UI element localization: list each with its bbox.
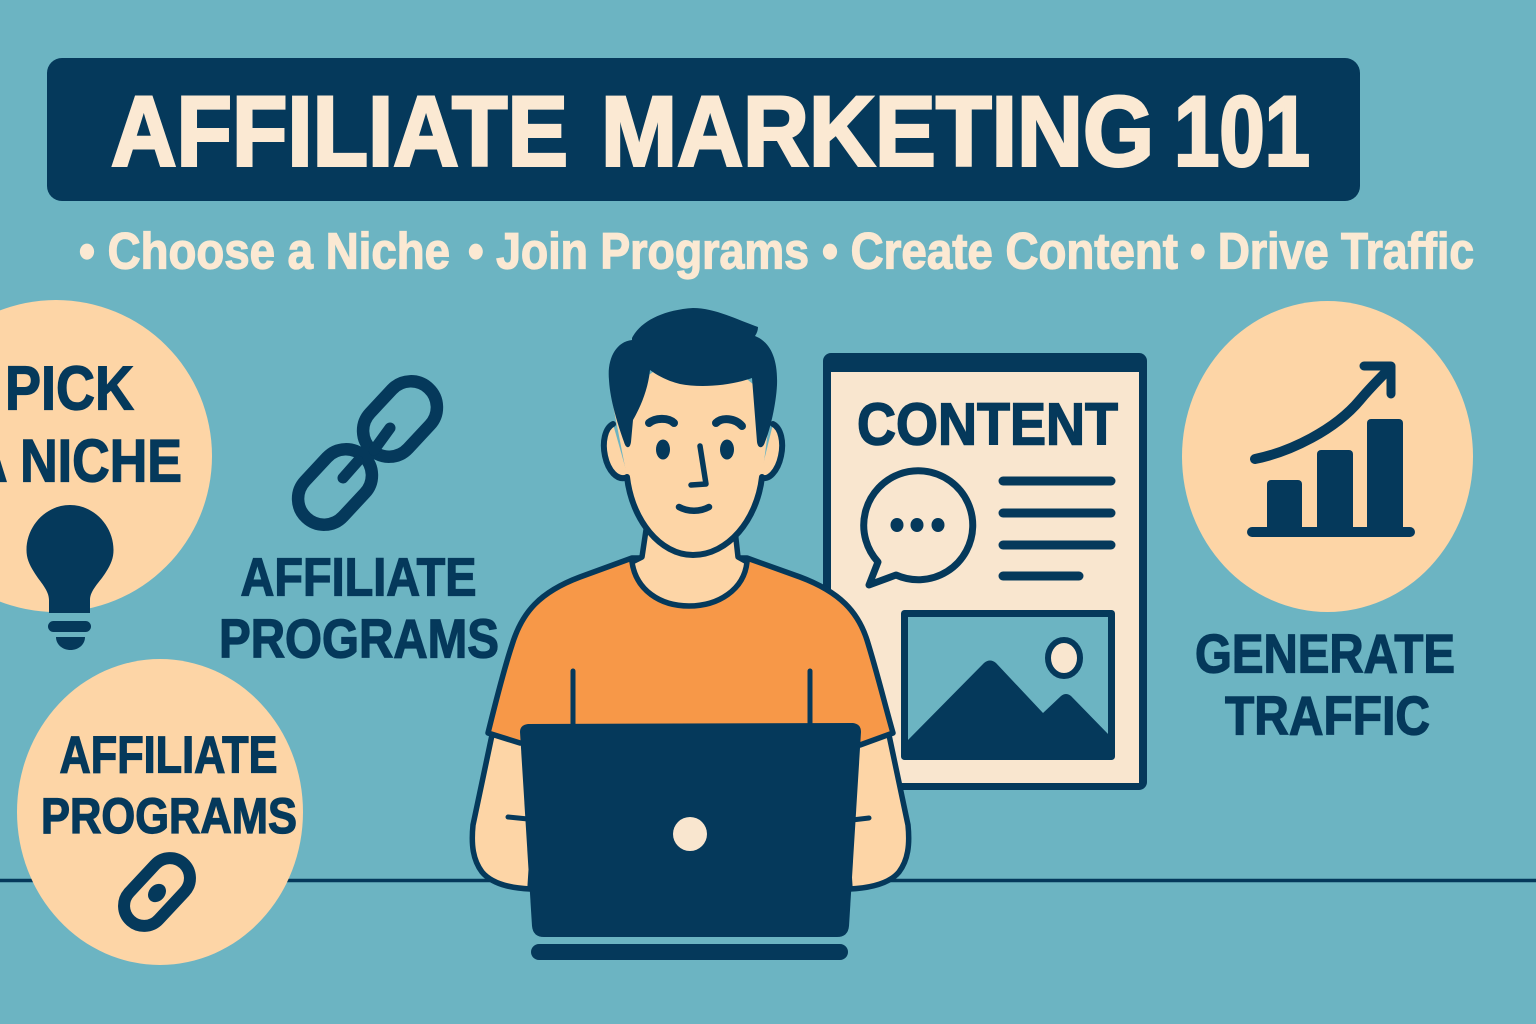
subtitle: four steps [79,222,1474,280]
panel: affiliate programs link: PROGRAMS [219,608,499,670]
subtitle: four steps: • Choose a Niche [79,222,450,280]
arms [472,735,909,889]
panel: pick a niche [0,300,212,650]
panel: affiliate programs circle: PROGRAMS [41,788,297,844]
shirt fold lines [508,671,869,820]
title banner: MARKETING [601,76,1154,186]
subtitle: four steps: • Create Content [822,222,1178,280]
image placeholder [904,614,1112,756]
icon: link [116,850,198,934]
ears [604,424,782,478]
panel: generate traffic: GENERATE [1195,622,1455,684]
panel: content page: CONTENT [857,392,1118,458]
title banner [47,58,1360,201]
panel: affiliate programs link: AFFILIATE [240,548,476,608]
icon: light bulb [26,505,114,650]
icon: chain link [287,371,448,535]
laptop [520,723,861,960]
icon: speech bubble [864,471,973,585]
panel: affiliate programs link [219,371,499,670]
panel: generate traffic: TRAFFIC [1225,684,1430,746]
panel: affiliate programs circle [17,659,303,965]
icon: growth chart [1247,366,1415,537]
t-shirt [488,558,893,745]
desk line [0,879,1536,882]
subtitle: four steps: • Drive Traffic [1190,222,1474,280]
panel: generate traffic [1182,301,1473,746]
title banner: AFFILIATE [111,76,568,186]
person at laptop [472,308,909,960]
text lines [1003,481,1111,576]
face [612,340,772,555]
panel: content page [823,353,1147,790]
panel: affiliate programs circle: AFFILIATE [60,726,278,784]
title banner: 101 [1174,76,1310,186]
panel: pick a niche: PICK [5,354,134,424]
subtitle: four steps: • Join Programs [468,222,809,280]
neck [632,530,747,606]
facial features [649,419,742,511]
hair [609,308,777,447]
